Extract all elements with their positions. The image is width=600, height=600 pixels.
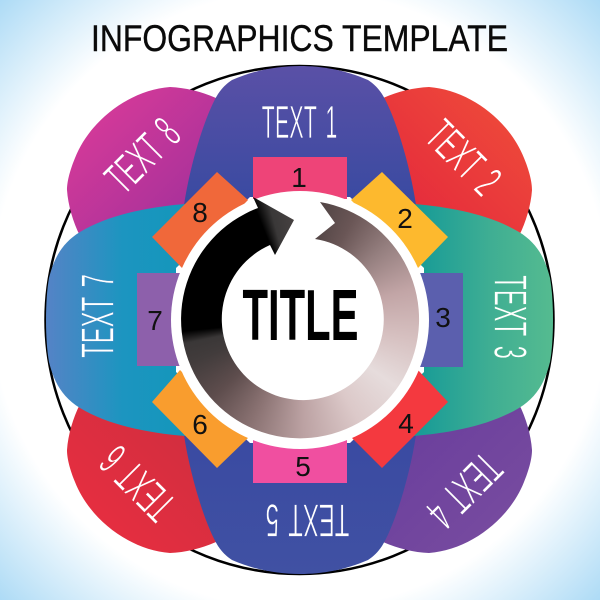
tab 4 [352, 370, 448, 468]
outer ring [46, 66, 554, 574]
title: INFOGRAPHICS TEMPLATE [91, 18, 508, 59]
panel: text 4 [383, 404, 532, 553]
panel: text 8 [67, 87, 216, 236]
circular arrow [181, 197, 419, 438]
panel: text 1: TEXT 1 [262, 96, 337, 148]
panel: text 4: TEXT 4 [417, 443, 512, 538]
panel: text 2 [383, 87, 532, 236]
tab 3: 3 [435, 302, 451, 333]
panel: text 7: TEXT 7 [72, 274, 124, 358]
panel: text 5: TEXT 5 [266, 494, 349, 546]
panel: text 7 [46, 204, 185, 436]
tab 8: 8 [192, 197, 208, 228]
panel: text 1 [184, 66, 416, 205]
panel: text 8: TEXT 8 [95, 108, 190, 203]
tab 7 [137, 273, 180, 366]
tab 4: 4 [398, 408, 414, 439]
white backing [176, 197, 424, 443]
tab 3 [420, 273, 463, 367]
tab 5 [253, 438, 347, 483]
tab 6 [152, 370, 248, 468]
tab 2 [351, 172, 448, 268]
panel: text 6 [67, 404, 216, 553]
tab 7: 7 [147, 305, 163, 336]
central white disc [171, 191, 429, 449]
tab 1: 1 [291, 162, 307, 193]
tab 6: 6 [192, 409, 208, 440]
tab 1 [253, 157, 347, 199]
tab 5: 5 [295, 451, 311, 482]
panel: text 3 [414, 204, 553, 436]
center title: TITLE [243, 276, 358, 356]
panel: text 3: TEXT 3 [484, 275, 536, 359]
panel: text 2: TEXT 2 [416, 110, 511, 205]
panel: text 5 [184, 435, 416, 574]
tab 8 [152, 172, 248, 268]
tab 2: 2 [397, 203, 413, 234]
panel: text 6: TEXT 6 [90, 436, 185, 531]
